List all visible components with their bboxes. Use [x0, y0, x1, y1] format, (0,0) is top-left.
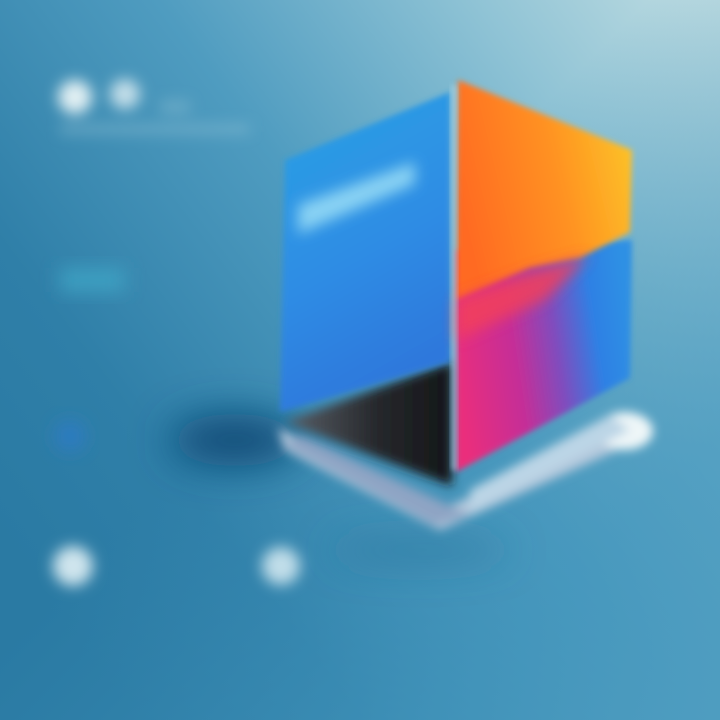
right orange face [456, 80, 632, 300]
right lower gradient face [456, 240, 632, 472]
pink-red transition [456, 255, 590, 340]
teal text blob [60, 268, 125, 292]
shadow beneath device [170, 414, 510, 562]
dark keyboard triangle [285, 362, 452, 486]
left blue face [280, 92, 450, 412]
blue dot blob [55, 421, 85, 451]
laptop base [278, 412, 653, 530]
placeholder heading blobs [58, 79, 250, 134]
white streak on left face [298, 162, 415, 234]
centre seam [451, 85, 457, 470]
device illustration [278, 80, 653, 530]
white dot blobs lower [53, 546, 300, 586]
